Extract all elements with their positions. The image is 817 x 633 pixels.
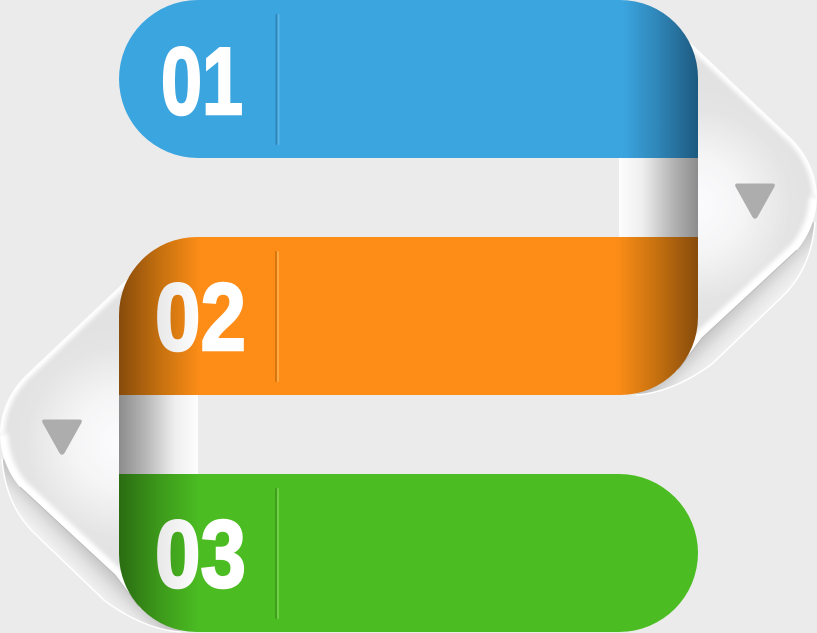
right paper fold [636, 14, 817, 395]
left paper fold [0, 251, 181, 632]
icon: right down arrow [736, 184, 774, 218]
divider [275, 251, 279, 382]
number 01: 01 [161, 28, 243, 135]
number 03: 03 [155, 501, 246, 608]
panel: step 03 green bar [119, 474, 698, 632]
right connector strip [619, 157, 698, 238]
panel: step 02 orange bar [119, 237, 698, 395]
number 02: 02 [155, 264, 246, 371]
divider [276, 14, 280, 145]
left connector strip [119, 394, 198, 475]
divider [275, 488, 279, 619]
panel: step 01 blue bar [119, 0, 698, 158]
icon: left down arrow [43, 420, 81, 454]
